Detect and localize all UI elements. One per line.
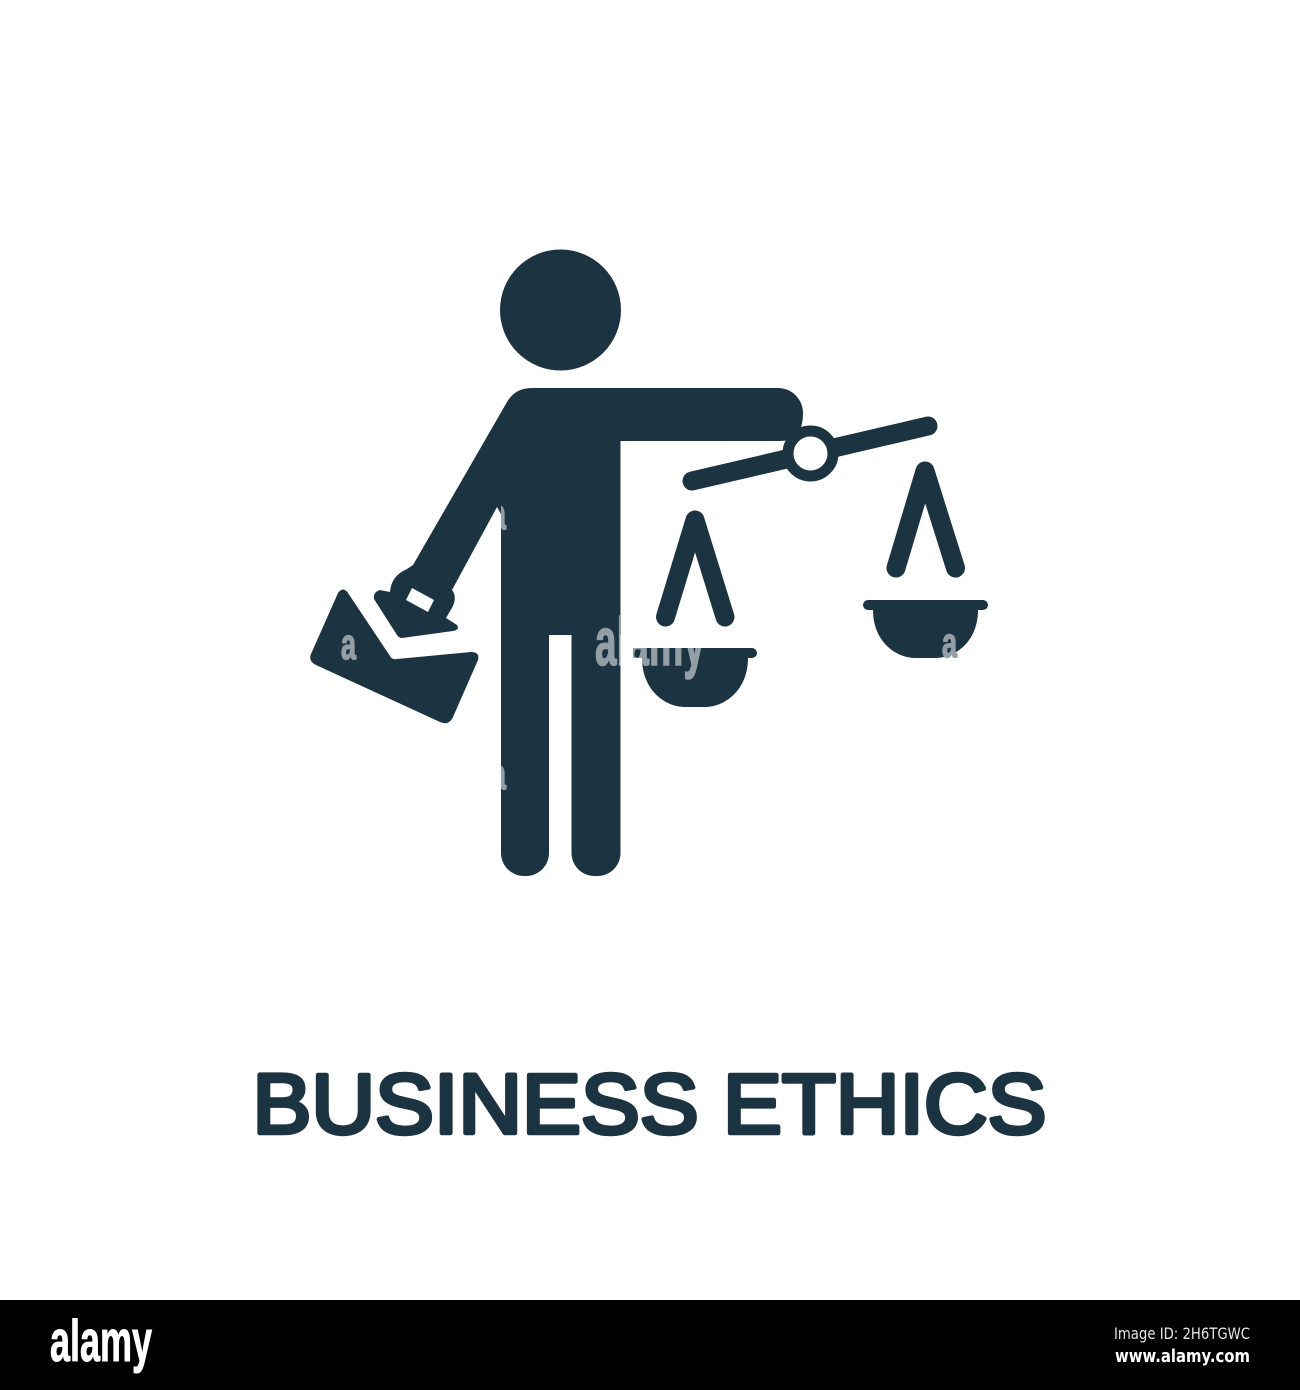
- footer website: www.alamy.com: [1115, 1346, 1250, 1367]
- watermark: letter on briefcase: a: [341, 620, 356, 669]
- icon: scale pivot ring: [788, 431, 833, 476]
- footer logo: alamy: [50, 1309, 152, 1374]
- title: BUSINESS ETHICS: [252, 1057, 1046, 1151]
- icon: left scale strings: [666, 520, 725, 617]
- footer image id: Image ID: 2H6TGWC: [1114, 1324, 1250, 1343]
- icon: right scale strings: [896, 471, 956, 568]
- watermark fragments: [341, 506, 958, 790]
- icon: businessperson holding scales and briefcase: [310, 250, 988, 876]
- footer bar: [0, 1300, 1300, 1390]
- watermark: letter on shoulder: a: [641, 360, 656, 409]
- icon: right scale pan: [863, 600, 988, 658]
- icon: cuff window: [406, 588, 434, 612]
- icon: head: [500, 250, 621, 370]
- watermark: letter on right pan: a: [942, 619, 957, 666]
- icon: briefcase: [310, 590, 478, 723]
- watermark: large alamy across pan: alamy: [595, 604, 705, 680]
- watermark: letter at armpit: a: [491, 490, 506, 539]
- icon: left scale pan: [633, 648, 757, 707]
- icon: scale beam: [692, 426, 928, 481]
- watermark: letter on leg: a: [491, 750, 506, 799]
- icon: body with outstretched arm: [374, 388, 803, 876]
